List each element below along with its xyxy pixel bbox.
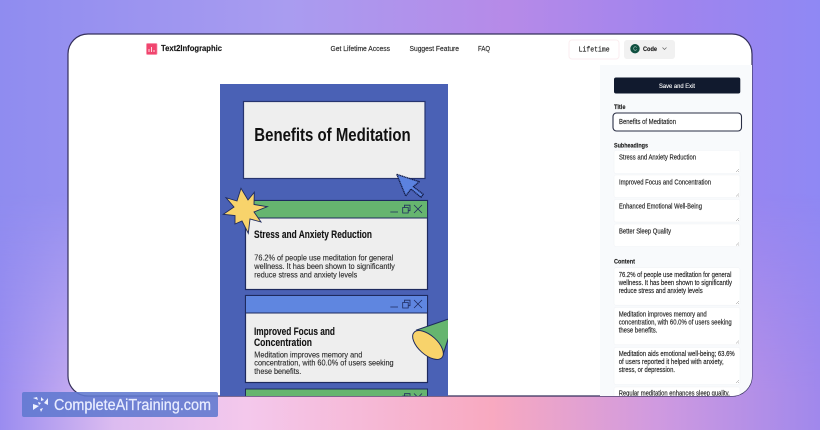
card: stress and anxiety: wellness. It has been shown to significantly <box>253 261 396 271</box>
icon: starburst <box>223 188 267 233</box>
content fields: these benefits. <box>619 328 657 335</box>
save button: Save and Exit <box>659 83 695 90</box>
content fields: reduce stress and anxiety levels <box>619 288 703 295</box>
lifetime badge <box>569 40 619 59</box>
icon: cursor arrow <box>397 174 423 197</box>
card: improved focus: Improved Focus and <box>254 326 335 338</box>
content fields: Meditation aids emotional well-being; 63.6% <box>619 351 735 358</box>
card: next section header <box>245 388 428 396</box>
watermark text: CompleteAiTraining.com <box>54 397 211 414</box>
content fields: of users reported it helped with anxiety, <box>619 359 724 366</box>
card: improved focus: these benefits. <box>254 366 301 376</box>
subheadings fields <box>614 142 740 246</box>
content fields <box>614 258 740 407</box>
content fields: Content <box>614 258 636 265</box>
content fields: 76.2% of people use meditation for general <box>619 272 732 279</box>
subheadings fields: Improved Focus and Concentration <box>619 179 711 186</box>
title box: Benefits of Meditation <box>254 125 411 145</box>
card: stress and anxiety: 76.2% of people use meditation for general <box>254 253 393 263</box>
editor sidebar <box>600 65 752 407</box>
card: stress and anxiety <box>246 200 428 290</box>
watermark badge <box>22 392 218 417</box>
brand name: Text2Infographic <box>161 44 223 53</box>
icon: watermark logo <box>33 397 48 412</box>
subheadings fields: Enhanced Emotional Well-Being <box>619 204 702 211</box>
nav link: suggest feature: Suggest Feature <box>410 44 459 53</box>
card: improved focus <box>246 296 428 382</box>
app window <box>68 34 752 407</box>
title field <box>613 104 742 131</box>
card: stress and anxiety: reduce stress and anxiety levels <box>254 269 357 279</box>
lifetime badge: Lifetime <box>579 46 610 54</box>
subheadings fields: Better Sleep Quality <box>619 228 671 235</box>
content fields: Meditation improves memory and <box>619 312 707 319</box>
subheadings fields: Subheadings <box>614 142 648 150</box>
card: improved focus: Concentration <box>254 337 312 349</box>
content fields: concentration, with 60.0% of users seeking <box>619 320 732 327</box>
card: improved focus: concentration, with 60.0% of users seeking <box>254 358 394 368</box>
user menu <box>624 40 675 59</box>
title field: Benefits of Meditation <box>619 119 676 126</box>
icon: megaphone cone <box>412 318 448 360</box>
content fields: Regular meditation enhances sleep quality, <box>619 391 730 398</box>
content fields: wellness. It has been shown to significantly <box>618 280 732 287</box>
title box <box>244 102 425 178</box>
card: improved focus: Meditation improves memory and <box>254 349 363 359</box>
user menu: C <box>633 47 637 53</box>
user menu: Code <box>643 46 657 53</box>
content fields: stress, or depression. <box>619 367 675 374</box>
subheadings fields: Stress and Anxiety Reduction <box>619 155 696 162</box>
navigation bar <box>146 40 675 59</box>
save button <box>614 78 740 94</box>
infographic poster <box>220 84 448 406</box>
nav link: lifetime access: Get Lifetime Access <box>330 44 390 53</box>
card: stress and anxiety: Stress and Anxiety Reduction <box>254 229 372 241</box>
title field: Title <box>614 104 626 111</box>
nav link: FAQ: FAQ <box>478 44 490 53</box>
icon: logo <box>146 44 157 54</box>
